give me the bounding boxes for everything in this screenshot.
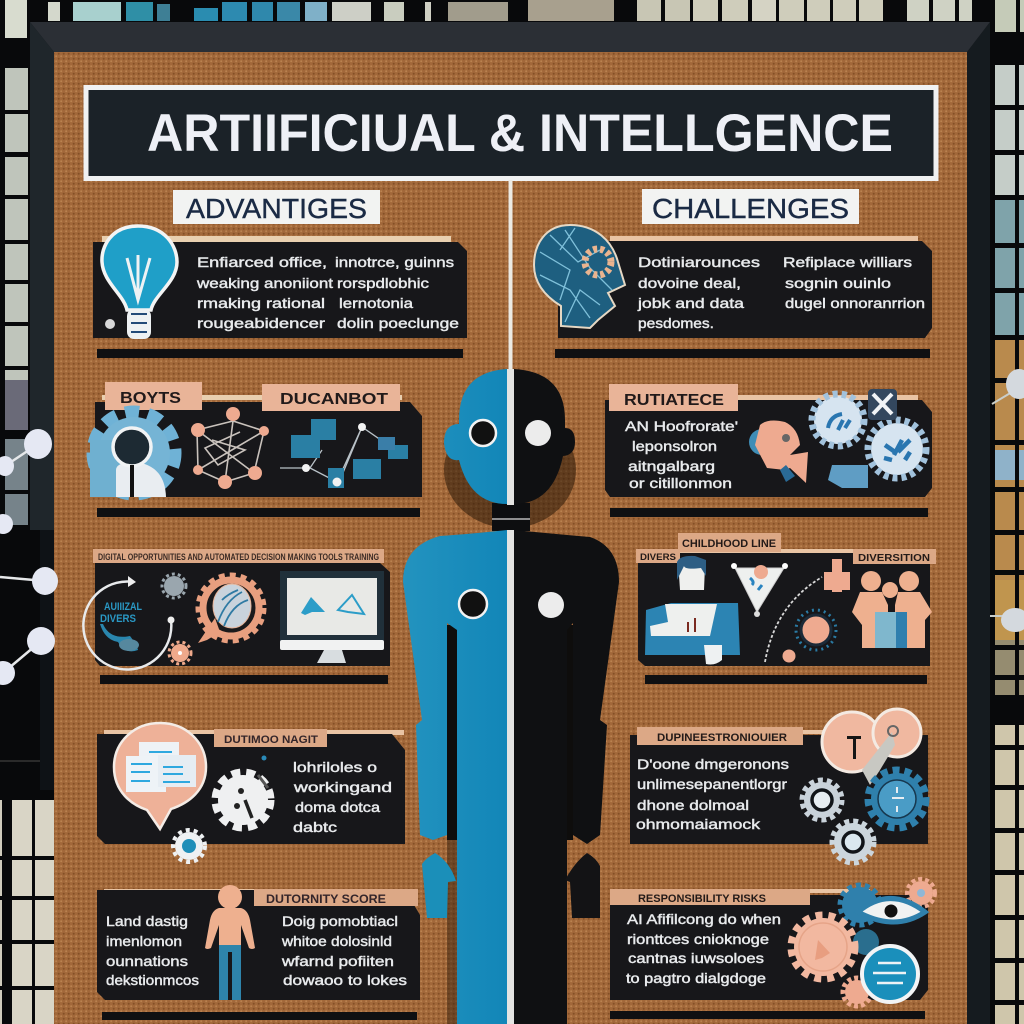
tab: long header: DIGITAL OPPORTUNITIES AND AUTOMATED DECISION MAKING TOOLS TRAINING — [98, 552, 379, 562]
text block left: Dotiniarounces — [638, 254, 760, 270]
icon: small peach gear lower — [843, 978, 871, 1006]
blue half — [403, 369, 507, 1024]
text block: Enfiarced office, — [197, 254, 327, 270]
text block right — [281, 913, 407, 988]
icon: menu disc — [862, 946, 918, 1002]
tab: DUCANBOT — [262, 384, 400, 411]
panel L5: community — [97, 885, 420, 1020]
arm gap shadows — [447, 625, 457, 840]
tab: left: DIVERS — [640, 552, 676, 562]
tab: small header: DUTIMOO NAGIT — [224, 734, 318, 746]
tab: header: DUTORNITY SCORE — [266, 892, 386, 906]
text block: weaking anoniiont — [196, 275, 333, 291]
tab: right — [853, 549, 936, 564]
icon: worker at laptop — [645, 556, 740, 664]
text block left: imenlomon — [106, 933, 182, 949]
icon: lower grey gear — [832, 821, 874, 863]
icon: triangle diagram — [731, 563, 788, 617]
icon: eye — [858, 898, 925, 922]
tab: BOYTS: BOYTS — [120, 390, 181, 407]
panel R2: resistance — [605, 384, 932, 517]
icon: peach gear speech bubble — [198, 575, 264, 643]
tab: header — [609, 384, 738, 411]
icon: family group — [852, 571, 932, 648]
tab: DUCANBOT: DUCANBOT — [280, 391, 388, 408]
text block — [626, 911, 781, 986]
panel R5: responsibility — [610, 879, 935, 1019]
left eye — [470, 420, 496, 446]
tab: small header — [214, 729, 327, 747]
tab: centre: CHILDHOOD LINE — [682, 538, 776, 550]
icon: person — [205, 885, 255, 1000]
icon: data screens network — [280, 419, 408, 488]
text block: D'oone dmgeronons — [637, 756, 789, 772]
panel L2: bots — [90, 382, 422, 517]
text block: rionttces cnioknoge — [627, 931, 769, 947]
panel R1: jobs and data — [534, 225, 932, 358]
heading: challenges: CHALLENGES — [652, 193, 849, 224]
text block right: Doig pomobtiacl — [282, 913, 398, 929]
centre divider — [508, 180, 512, 370]
icon: puzzle head — [749, 421, 808, 483]
panel L4: data tools — [97, 723, 405, 862]
text block: cantnas iuwsoloes — [628, 950, 764, 966]
text block: aitngalbarg — [628, 458, 715, 474]
icon: small dark gear — [782, 610, 836, 662]
icon: desktop monitor — [280, 571, 384, 663]
icon: circular arrows with text: DIVERS — [100, 613, 136, 625]
text block: AN Hoofrorate' — [625, 418, 738, 434]
icon: peach gear small — [907, 879, 935, 907]
text block: leponsolron — [632, 438, 717, 454]
text block left: jobk and data — [637, 295, 744, 311]
text block: dhone dolmoal — [637, 797, 749, 813]
icon: large peach gear — [791, 915, 855, 979]
text block: innotrce, guinns — [335, 254, 454, 270]
text block: to pagtro dialgdoge — [626, 970, 766, 986]
text block: unlimesepanentlorgr — [637, 776, 787, 792]
panel R4: ethics gears — [630, 709, 928, 863]
side network nodes: left — [0, 429, 58, 685]
text block: lernotonia — [339, 295, 413, 311]
icon: small teal gear — [173, 830, 205, 862]
side network nodes: right — [990, 369, 1024, 632]
icon: plus — [824, 559, 850, 592]
icon: grey gear — [802, 780, 842, 820]
tab: BOYTS — [105, 382, 202, 410]
panel R3: worker and family — [636, 533, 936, 684]
centre stripe — [507, 369, 514, 505]
text block left: Land dastig — [106, 913, 188, 929]
text block: rougeabidencer — [197, 315, 325, 331]
central figure: half blue, half black — [403, 369, 619, 1024]
tab: header — [254, 889, 418, 906]
text block right: whitoe dolosinld — [281, 933, 392, 949]
tab: header: RESPONSIBILITY RISKS — [638, 893, 766, 905]
text block right: dowaoo to lokes — [283, 972, 407, 988]
icon: small peach gear — [169, 642, 191, 664]
right eye — [525, 420, 551, 446]
text block — [636, 756, 789, 832]
tab: header: DUPINEESTRONIOUIER — [657, 732, 787, 744]
icon: circular arrows with text: AUIIIZAL — [104, 601, 142, 613]
text block left: dovoine deal, — [638, 275, 741, 291]
text block: or citillonmon — [629, 475, 732, 491]
icon: gear with person — [90, 412, 175, 497]
text block left: ounnations — [106, 953, 188, 969]
top window cells — [5, 0, 1024, 38]
text block: dolin poeclunge — [337, 315, 459, 331]
heading: advantages: ADVANTIGES — [186, 193, 367, 224]
icon: neural network — [191, 407, 269, 489]
tab: right: DIVERSITION — [858, 553, 930, 564]
chest node black — [538, 592, 564, 618]
icon: peach discs and key — [822, 709, 921, 785]
black half — [514, 369, 619, 1024]
icon: circuit head — [534, 225, 625, 328]
text block left — [106, 913, 199, 988]
icon: X badge — [868, 389, 897, 420]
panel L3: digital diagrams — [83, 549, 390, 684]
text block: dabtc — [293, 819, 337, 835]
icon: blue gear behind eye — [840, 885, 880, 955]
chest node blue — [459, 590, 487, 618]
tab: long header — [93, 549, 384, 563]
icon: white gear — [215, 772, 271, 828]
text block right: wfarnd pofiiten — [281, 953, 394, 969]
title banner — [86, 88, 936, 178]
icon: twin gears — [812, 394, 926, 488]
text block: rmaking rational — [197, 295, 325, 311]
text block: lohriloles o — [293, 759, 377, 775]
text block — [625, 418, 738, 491]
tab: header: RUTIATECE — [624, 392, 724, 409]
icon: small grey gear — [162, 574, 186, 598]
text block right — [783, 254, 925, 311]
text block right: sognin ouinlo — [785, 275, 891, 291]
icon: circular arrows with text — [83, 576, 174, 669]
tab: centre — [678, 533, 781, 552]
text block: doma dotca — [295, 799, 380, 815]
tab: header — [610, 889, 810, 905]
text block left: pesdomes. — [638, 315, 714, 331]
panel L1: enhanced efficiency — [93, 226, 467, 358]
text block: AI Afifilcong do when — [627, 911, 781, 927]
text block: workingand — [293, 779, 392, 795]
title banner: ARTIIFICIUAL & INTELLGENCE — [147, 104, 893, 163]
text block right: dugel onnoranrrion — [785, 295, 925, 311]
icon: blue gear — [868, 770, 926, 828]
text block right: Refiplace williars — [783, 254, 912, 270]
tab: left — [636, 549, 680, 563]
icon: light bulb — [102, 226, 177, 339]
text block left — [637, 254, 760, 331]
tab: header — [637, 727, 803, 745]
figure shadow — [444, 412, 576, 528]
text block: ohmomaiamock — [636, 816, 761, 832]
icon: speech bubble with documents — [114, 723, 206, 829]
dotted arc — [765, 577, 822, 662]
neck — [492, 503, 530, 531]
text block — [196, 254, 459, 331]
text block: rorspdlobhic — [337, 275, 429, 291]
text block — [293, 759, 392, 835]
text block left: dekstionmcos — [106, 972, 199, 988]
